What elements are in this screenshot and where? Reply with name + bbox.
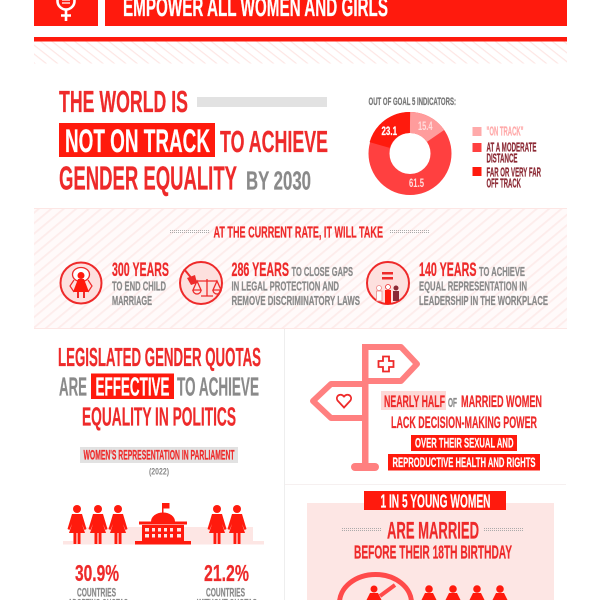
headline: not on track: BY 2030 [246,168,311,196]
donut legend: DISTANCE [486,152,518,166]
stat: 30.9%: COUNTRIES [77,586,116,600]
icon: parliament building [135,503,191,544]
stat: 21.2%: COUNTRIES [206,586,245,600]
icon: prohibited ring [340,574,412,600]
stat: 140 years [419,260,548,308]
text: FAR OR VERY FAR [486,166,541,180]
label: women's representation: WOMEN'S REPRESENTATION IN PARLIAMENT [84,447,235,462]
text: decision-making power: NEARLY HALF [384,392,445,411]
donut chart: 23.1 [382,124,397,138]
stat: 286 years: REMOVE DISCRIMINATORY LAWS [232,293,360,308]
donut chart [379,119,441,190]
headline: not on track: TO ACHIEVE [220,124,328,159]
heading: quotas: EQUALITY IN POLITICS [82,404,236,432]
stat: 286 years [232,260,360,308]
heading: quotas: LEGISLATED GENDER QUOTAS [58,344,261,372]
headline: not on track: GENDER EQUALITY [59,160,237,196]
stat: 21.2%: 21.2% [204,560,249,586]
icon: signpost [313,344,417,471]
banner: 1 in 5 young women [364,491,506,511]
icon: young women [421,585,508,600]
heading: current rate: AT THE CURRENT RATE, IT WILL TAKE [214,224,383,241]
icon: leadership equality [367,262,409,304]
icon: medical cross [378,356,394,372]
donut chart: 15.4 [418,119,433,133]
headline: not on track: NOT ON TRACK [65,123,210,159]
stat: 30.9%: 30.9% [75,560,119,586]
heading: quotas: EFFECTIVE [96,374,170,402]
stat: 300 years: MARRIAGE [112,293,152,308]
stat: 140 years: TO ACHIEVE [479,264,525,279]
dividers [284,329,566,600]
header rule [34,37,567,42]
icon: venus symbol [58,0,74,21]
header icon box [34,0,98,26]
label: women's representation [80,447,238,478]
donut legend: "ON TRACK" [486,124,524,138]
donut chart: 61.5 [409,176,424,190]
stat: 286 years: 286 YEARS [232,260,289,281]
stat: 286 years: TO CLOSE GAPS [292,264,353,279]
stat: 300 years [112,260,169,308]
stat: 30.9% [68,560,128,600]
text: decision-making power: OF [448,395,457,410]
panel: legislated quotas [58,344,264,600]
stat: 300 years: TO END CHILD [112,278,166,294]
panel: current rate [34,208,567,329]
stat: 21.2% [197,560,257,600]
label: women's representation: (2022) [149,466,169,478]
donut legend [472,124,541,190]
donut legend: OFF TRACK [486,176,521,190]
donut legend: AT A MODERATE [486,140,536,154]
heading: quotas: ARE [59,374,87,402]
heading: quotas: TO ACHIEVE [177,374,259,402]
text: are married: ARE MARRIED [387,517,479,544]
text: decision-making power: OVER THEIR SEXUAL AND [415,436,514,450]
headline: not on track [59,85,328,196]
icon: legal scales [180,262,222,304]
icon: women without quotas [208,505,246,544]
heading: quotas [58,344,261,432]
donut chart heading: OUT OF GOAL 5 INDICATORS: [368,96,456,108]
header title bar [105,0,567,26]
stat: 140 years: EQUAL REPRESENTATION IN [419,278,527,294]
headline: not on track: THE WORLD IS [59,85,188,119]
chart: parliament pictogram [63,503,264,544]
text: decision-making power [381,391,542,470]
icon: women with quotas [68,505,128,544]
banner: 1 in 5 young women: 1 IN 5 YOUNG WOMEN [380,491,490,511]
stat: 300 years: 300 YEARS [112,260,169,281]
icon: heart [337,395,351,408]
panel: child marriage [307,491,554,600]
stat: 140 years: 140 YEARS [419,260,476,281]
stat: 286 years: IN LEGAL PROTECTION AND [232,278,339,294]
icon: child marriage [60,262,102,304]
